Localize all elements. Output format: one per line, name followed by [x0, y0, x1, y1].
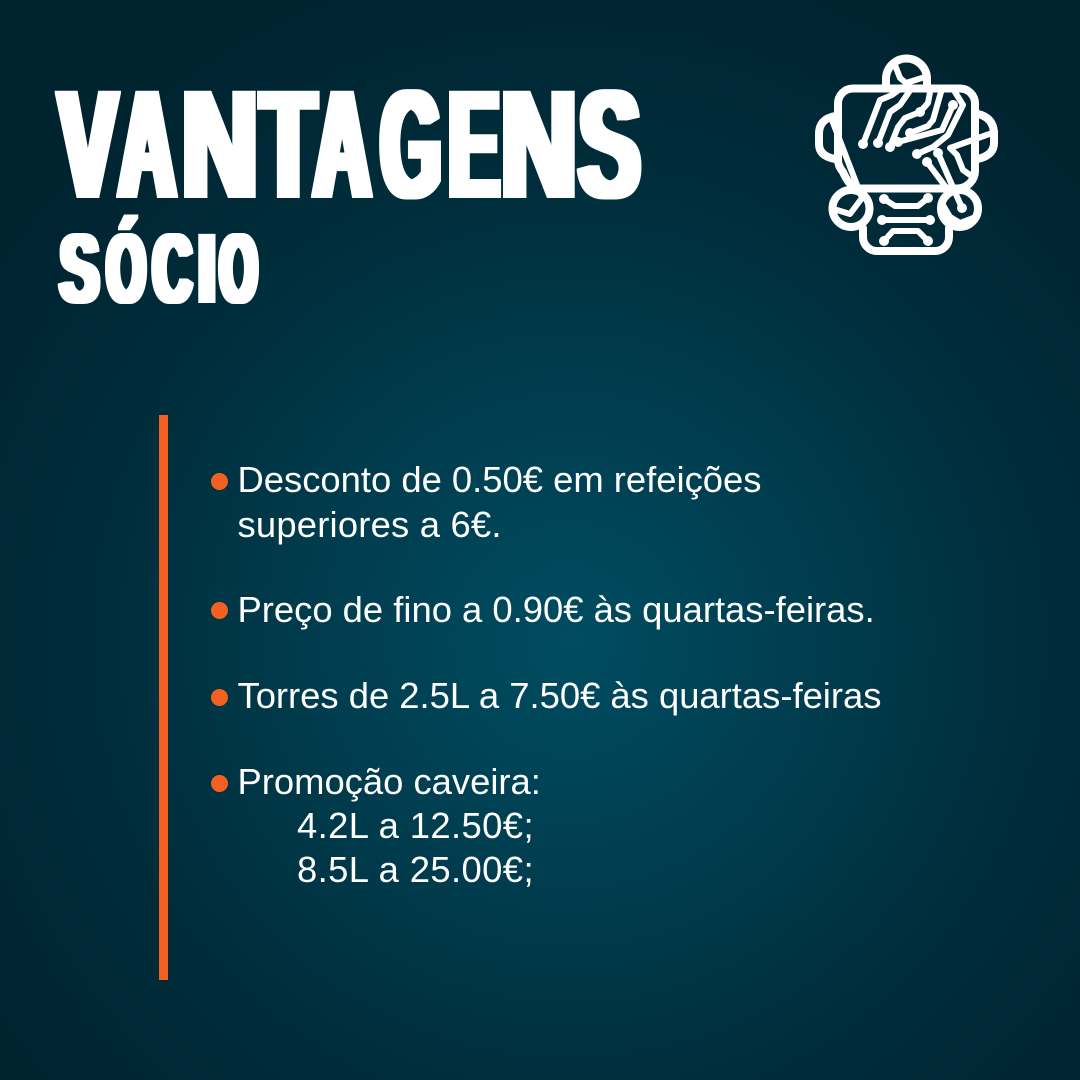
heading: SÓCIO	[58, 214, 259, 323]
heading: VANTAGENS: A	[119, 58, 175, 230]
heading: VANTAGENS: N	[501, 58, 576, 230]
heading: SÓCIO: Ó	[107, 214, 145, 323]
benefit 4	[211, 761, 541, 890]
heading: SÓCIO: I	[198, 214, 215, 323]
text: 4.2L a 12.50€;	[297, 805, 534, 846]
bullet	[211, 689, 228, 706]
heading: VANTAGENS: T	[261, 58, 316, 230]
heading: VANTAGENS: N	[182, 58, 257, 230]
heading: VANTAGENS	[54, 58, 642, 230]
heading: SÓCIO: C	[153, 214, 191, 323]
bullet	[211, 775, 228, 792]
text	[238, 761, 541, 890]
text: Desconto de 0.50€ em refeições	[238, 459, 761, 500]
text: Promoção caveira:	[238, 761, 541, 802]
text: Torres de 2.5L a 7.50€ às quartas-feiras	[238, 675, 881, 716]
bullet	[211, 602, 228, 619]
title: VANTAGENS SÓCIO	[54, 58, 642, 323]
text: Preço de fino a 0.90€ às quartas-feiras.	[238, 589, 875, 630]
benefit 2	[211, 589, 875, 630]
text: 8.5L a 25.00€;	[297, 849, 534, 890]
heading: SÓCIO: S	[60, 214, 99, 323]
heading: VANTAGENS: A	[314, 58, 370, 230]
icon: circuit robot head	[815, 54, 998, 255]
heading: VANTAGENS: V	[59, 58, 116, 230]
benefit 3	[211, 675, 881, 716]
heading: VANTAGENS: E	[449, 58, 499, 230]
heading: VANTAGENS: S	[579, 58, 640, 230]
text	[238, 459, 761, 545]
text: superiores a 6€.	[238, 504, 502, 545]
heading: VANTAGENS: G	[380, 58, 440, 230]
benefit 1	[211, 459, 761, 545]
orange vertical bar	[159, 415, 168, 980]
bullet	[211, 473, 228, 490]
heading: SÓCIO: O	[220, 214, 257, 323]
